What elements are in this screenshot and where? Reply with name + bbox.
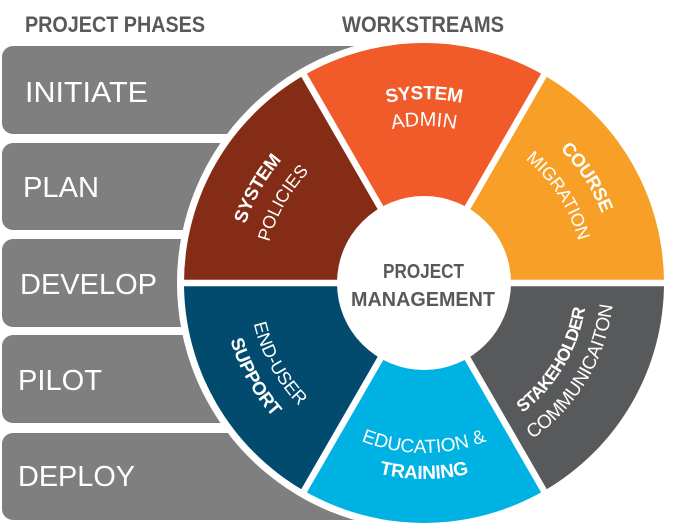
- heading: workstreams: WORKSTREAMS: [342, 12, 504, 37]
- hub: project management: [337, 196, 511, 370]
- segment: system policies: POLICIES: [258, 165, 308, 241]
- segment: course migration: [470, 76, 664, 280]
- heading: project phases: PROJECT PHASES: [25, 12, 205, 37]
- phase bar: pilot: [2, 335, 422, 423]
- hub: project management: PROJECT: [383, 261, 464, 283]
- phase bar: develop: DEVELOP: [20, 269, 157, 301]
- panel: workstreams wheel: [184, 43, 664, 523]
- segment: system policies: SYSTEM: [234, 153, 281, 222]
- segment: system admin: [306, 43, 542, 206]
- panel: project phase bars: [2, 46, 422, 520]
- phase bar: initiate: [2, 46, 422, 134]
- segment: education and training: [306, 360, 542, 523]
- segment: course migration: COURSE: [563, 143, 614, 213]
- segment: stakeholder communication: STAKEHOLDER: [517, 307, 586, 412]
- phase bar: deploy: DEPLOY: [18, 461, 135, 493]
- phase bar: develop: [2, 239, 422, 327]
- segment: end-user support: SUPPORT: [232, 338, 283, 414]
- hub: project management: MANAGEMENT: [351, 289, 495, 311]
- phase bar: plan: PLAN: [23, 172, 99, 204]
- phase bar: pilot: PILOT: [18, 365, 102, 397]
- segment: stakeholder communication: [470, 286, 664, 490]
- segment: end-user support: END-USER: [254, 322, 306, 406]
- segment: education and training: EDUCATION &: [362, 429, 486, 454]
- segment: end-user support: [184, 286, 378, 490]
- segment: education and training: TRAINING: [382, 461, 468, 479]
- phase bar: initiate: INITIATE: [25, 77, 148, 109]
- segment: system admin: SYSTEM: [386, 86, 463, 103]
- segment: course migration: MIGRATION: [526, 150, 590, 240]
- phase bar: deploy: [2, 433, 422, 520]
- segment: system policies: [184, 76, 378, 280]
- phase bar: plan: [2, 143, 422, 230]
- segment: stakeholder communication: COMMUNICAITON: [528, 304, 612, 436]
- segment: system admin: ADMIN: [392, 112, 457, 130]
